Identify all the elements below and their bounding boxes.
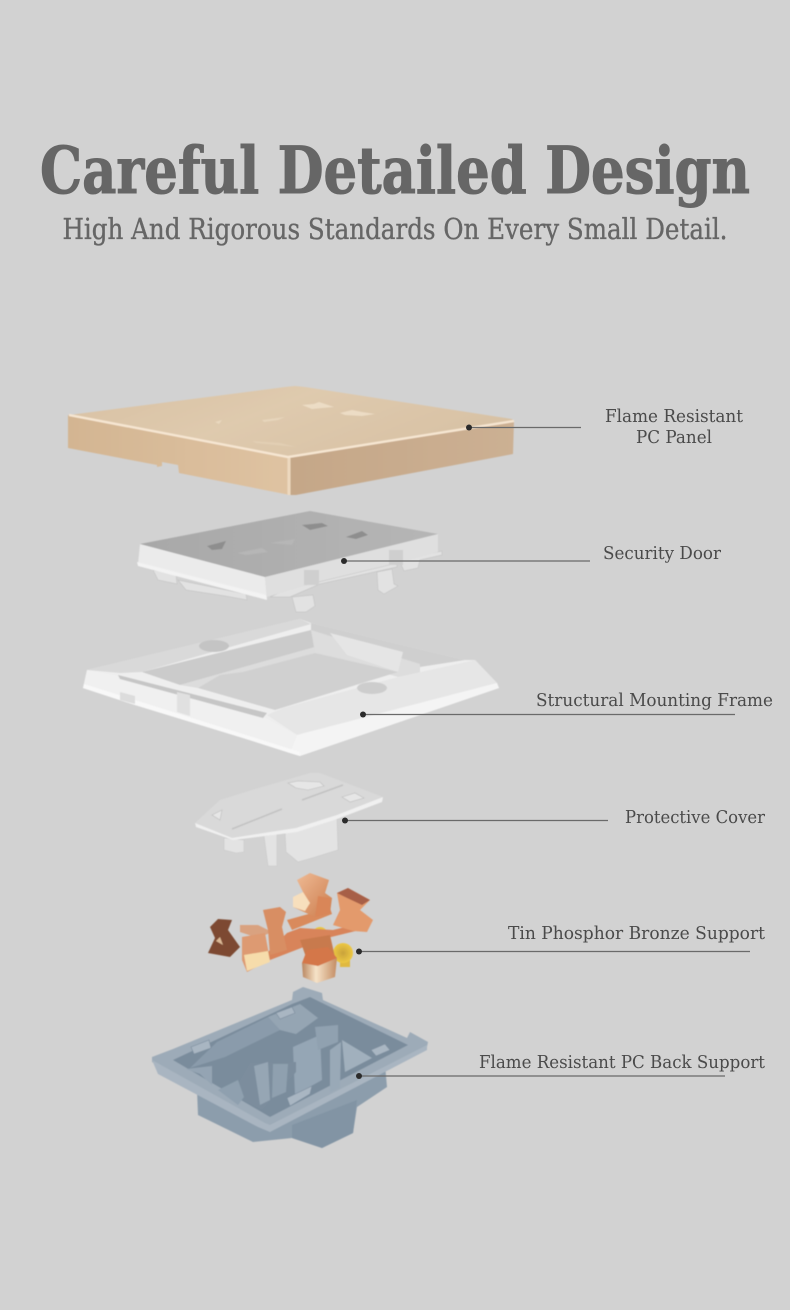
- clip: middle: [263, 907, 287, 955]
- interior floor: [173, 997, 408, 1117]
- label: flame resistant PC panel: [466, 406, 744, 448]
- lower housing: [197, 1065, 387, 1148]
- clip: right: [333, 888, 373, 932]
- clip: top centre: [293, 873, 332, 917]
- label: structural mounting frame: [360, 690, 773, 718]
- label: tin phosphor bronze support: Tin Phosphor Bronze Support: [508, 923, 766, 944]
- component: protective cover: [195, 773, 383, 866]
- front-left wall: [83, 670, 297, 753]
- component: grey flame resistant PC back support: [152, 987, 428, 1148]
- label: structural mounting frame: Structural Mounting Frame: [536, 690, 773, 711]
- brass rivets: [312, 927, 353, 967]
- label: flame resistant PC back support: Flame Resistant PC Back Support: [479, 1052, 766, 1073]
- clip: lower-left cube: [242, 933, 270, 972]
- label: protective cover: [342, 807, 765, 828]
- back-right rail: [311, 623, 465, 667]
- front-right rail: [267, 660, 497, 735]
- cylinder contact: [302, 958, 337, 983]
- back-left rail top: [87, 619, 311, 673]
- component: white structural mounting frame: [83, 619, 499, 756]
- copper arms: [287, 908, 332, 930]
- frame outer lip: [83, 619, 499, 756]
- label: tin phosphor bronze support: [356, 923, 766, 954]
- label: flame resistant PC panel: PC Panel: [636, 427, 712, 448]
- interior ribs and walls: [190, 1017, 280, 1068]
- opening: [198, 653, 398, 710]
- component: tin phosphor bronze copper support: [208, 873, 373, 983]
- label: security door: [341, 543, 721, 564]
- label: flame resistant PC back support: [356, 1052, 766, 1079]
- rim: [152, 987, 428, 1130]
- clip: far left brown: [208, 919, 240, 957]
- label: flame resistant PC panel: Flame Resistant: [605, 406, 744, 427]
- component: grey security door: [137, 511, 442, 612]
- back-left inner wall: [142, 630, 315, 685]
- mounting holes: [199, 640, 387, 694]
- label: protective cover: Protective Cover: [625, 807, 765, 828]
- component: gold flame resistant PC panel: [68, 386, 514, 495]
- label: security door: Security Door: [603, 543, 721, 564]
